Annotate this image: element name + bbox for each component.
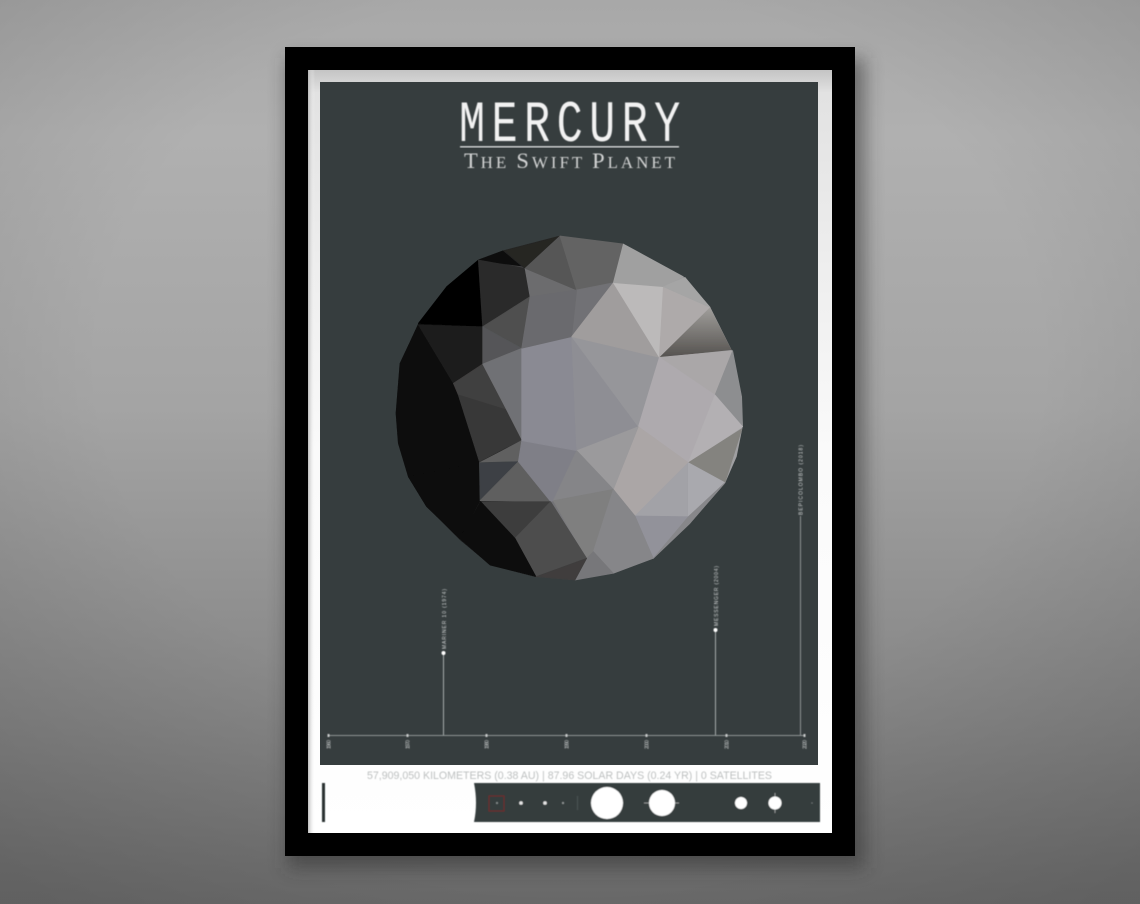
- solar system strip: [322, 783, 820, 822]
- timeline axis: 2020: [802, 740, 808, 749]
- mat left inner shadow: [308, 70, 315, 833]
- mission: Mariner 10: [442, 589, 448, 735]
- Venus: [519, 801, 523, 805]
- timeline axis: 2010: [724, 740, 730, 749]
- frame shadow: [287, 58, 865, 868]
- Uranus: [735, 797, 747, 809]
- Pluto: [811, 802, 813, 804]
- planet statistics: 57,909,050 KILOMETERS (0.38 AU) | 87.96 SOLAR DAYS (0.24 YR) | 0 SATELLITES: [367, 770, 772, 782]
- mission: BepiColombo: BEPICOLOMBO (2018): [798, 445, 804, 515]
- Jupiter: [591, 787, 623, 819]
- white mat: [308, 70, 832, 833]
- timeline axis: 1960: [326, 740, 332, 749]
- Earth: [543, 801, 547, 805]
- asteroid belt line: [577, 796, 578, 810]
- timeline axis: [326, 734, 808, 749]
- timeline: [326, 445, 808, 749]
- Saturn: [644, 790, 679, 816]
- strip background with sun edge: [474, 783, 820, 822]
- timeline axis: 1970: [406, 740, 412, 749]
- poster panel: [320, 82, 818, 765]
- black frame: [285, 47, 855, 856]
- timeline axis: 1990: [564, 740, 570, 749]
- Mars: [562, 802, 564, 804]
- left marker bar: [322, 783, 325, 822]
- planet: low-poly Mercury: [396, 236, 743, 580]
- subtitle: THE SWIFT PLANET: [464, 148, 676, 173]
- timeline axis: 2000: [644, 740, 650, 749]
- mission: Mariner 10: MARINER 10 (1974): [442, 589, 448, 649]
- timeline axis: 1980: [484, 740, 490, 749]
- Neptune: [768, 793, 782, 813]
- title rule: [460, 146, 679, 148]
- title: MERCURY: [459, 93, 680, 159]
- mission: Messenger: MESSENGER (2004): [714, 566, 720, 626]
- Mercury highlight box: [489, 796, 504, 811]
- mission: Messenger: [714, 566, 720, 735]
